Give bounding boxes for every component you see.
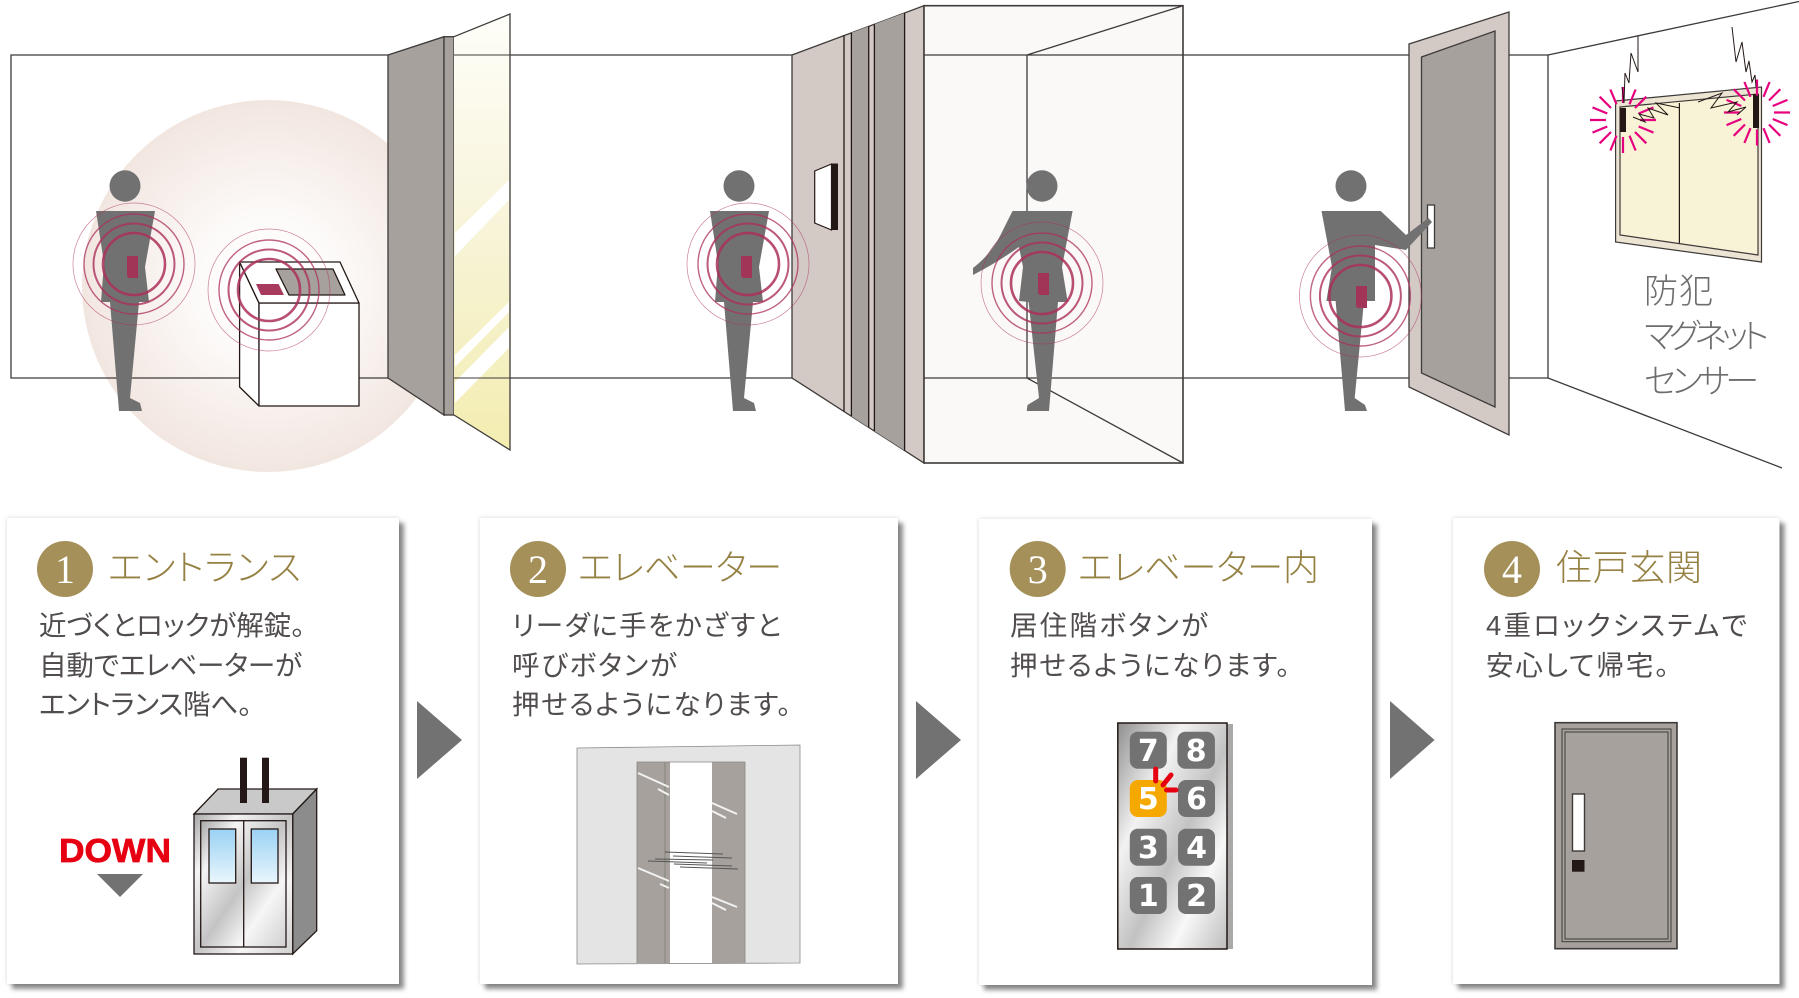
person 4 — [1322, 170, 1432, 411]
step number 1: 1 — [55, 547, 75, 592]
illustration: keypad: 3 — [1138, 831, 1159, 866]
label: DOWN: DOWN — [59, 832, 171, 869]
heading: entrance: エントランス — [108, 547, 301, 588]
sensor label: センサー — [1644, 363, 1759, 401]
illustration: keypad: 5 — [1138, 782, 1159, 817]
step number 3: 3 — [1028, 547, 1048, 592]
illustration: keypad: 8 — [1186, 734, 1207, 769]
person 2 — [710, 170, 769, 411]
signal rings: person 4 — [1299, 235, 1421, 357]
step number 1 — [37, 541, 93, 597]
panel: step 4 apartment entrance — [1453, 518, 1780, 984]
icon: down triangle — [97, 874, 143, 897]
step number 4: 4 — [1502, 547, 1522, 592]
wall outlines — [11, 2, 1799, 468]
text: step 1 description: エントランス階へ。 — [39, 689, 252, 720]
sensor label: マグネット — [1644, 318, 1769, 356]
text: step 4 description: 安心して帰宅。 — [1486, 650, 1669, 681]
arrow 2 — [916, 701, 961, 779]
panel: step 1 entrance — [7, 518, 399, 984]
heading: inside elevator: エレベーター内 — [1078, 547, 1319, 588]
illustration: keypad: 6 — [1186, 782, 1207, 817]
text: step 2 description: リーダに手をかざすと — [512, 610, 781, 641]
signal rings: person 1 — [73, 203, 195, 325]
sensor label: 防犯 — [1644, 273, 1713, 311]
text: step 3 description — [1010, 610, 1290, 681]
elevator interior — [924, 6, 1183, 463]
text: step 4 description — [1486, 610, 1747, 681]
arrow 1 — [417, 701, 462, 779]
illustration: keypad: 2 — [1186, 879, 1207, 914]
step number 2: 2 — [528, 547, 548, 592]
person 3 — [973, 170, 1073, 411]
panel: step 3 inside elevator — [979, 519, 1372, 985]
illustration: opening elevator doors — [577, 745, 800, 964]
step number 2 — [510, 541, 566, 597]
person 1 — [96, 170, 155, 411]
text: step 2 description: 押せるようになります。 — [512, 689, 791, 720]
text: step 2 description — [512, 610, 791, 720]
signal rings: person 3 — [981, 222, 1103, 344]
illustration: keypad: 4 — [1186, 831, 1207, 866]
text: step 4 description: 4重ロックシステムで — [1486, 610, 1747, 641]
illustration: front door — [1555, 723, 1677, 949]
entrance door panel — [388, 14, 510, 450]
text: step 1 description: 自動でエレベーターが — [39, 650, 302, 681]
icon: elevator — [194, 758, 317, 954]
step number 4 — [1484, 541, 1540, 597]
window with magnet sensors — [1590, 27, 1790, 262]
text: step 3 description: 押せるようになります。 — [1010, 650, 1290, 681]
text: step 1 description — [39, 610, 305, 720]
step number 3 — [1010, 541, 1066, 597]
signal rings: kiosk — [208, 229, 330, 351]
illustration: keypad: 1 — [1138, 879, 1159, 914]
heading: apartment entrance: 住戸玄関 — [1556, 547, 1702, 588]
glow circle: detection area — [82, 100, 454, 472]
text: step 3 description: 居住階ボタンが — [1010, 610, 1208, 641]
arrow 3 — [1390, 701, 1435, 779]
illustration: keypad — [1118, 723, 1233, 949]
text: step 2 description: 呼びボタンが — [512, 650, 677, 681]
elevator hall wall — [792, 6, 924, 463]
panel: step 2 elevator — [480, 518, 898, 984]
text: step 1 description: 近づくとロックが解錠。 — [39, 610, 305, 641]
illustration: keypad: 7 — [1138, 734, 1159, 769]
kiosk reader — [240, 262, 359, 406]
sensor label — [1644, 273, 1769, 401]
signal rings: person 2 — [687, 203, 809, 325]
heading: elevator: エレベーター — [578, 547, 782, 588]
apartment door — [1409, 12, 1509, 435]
